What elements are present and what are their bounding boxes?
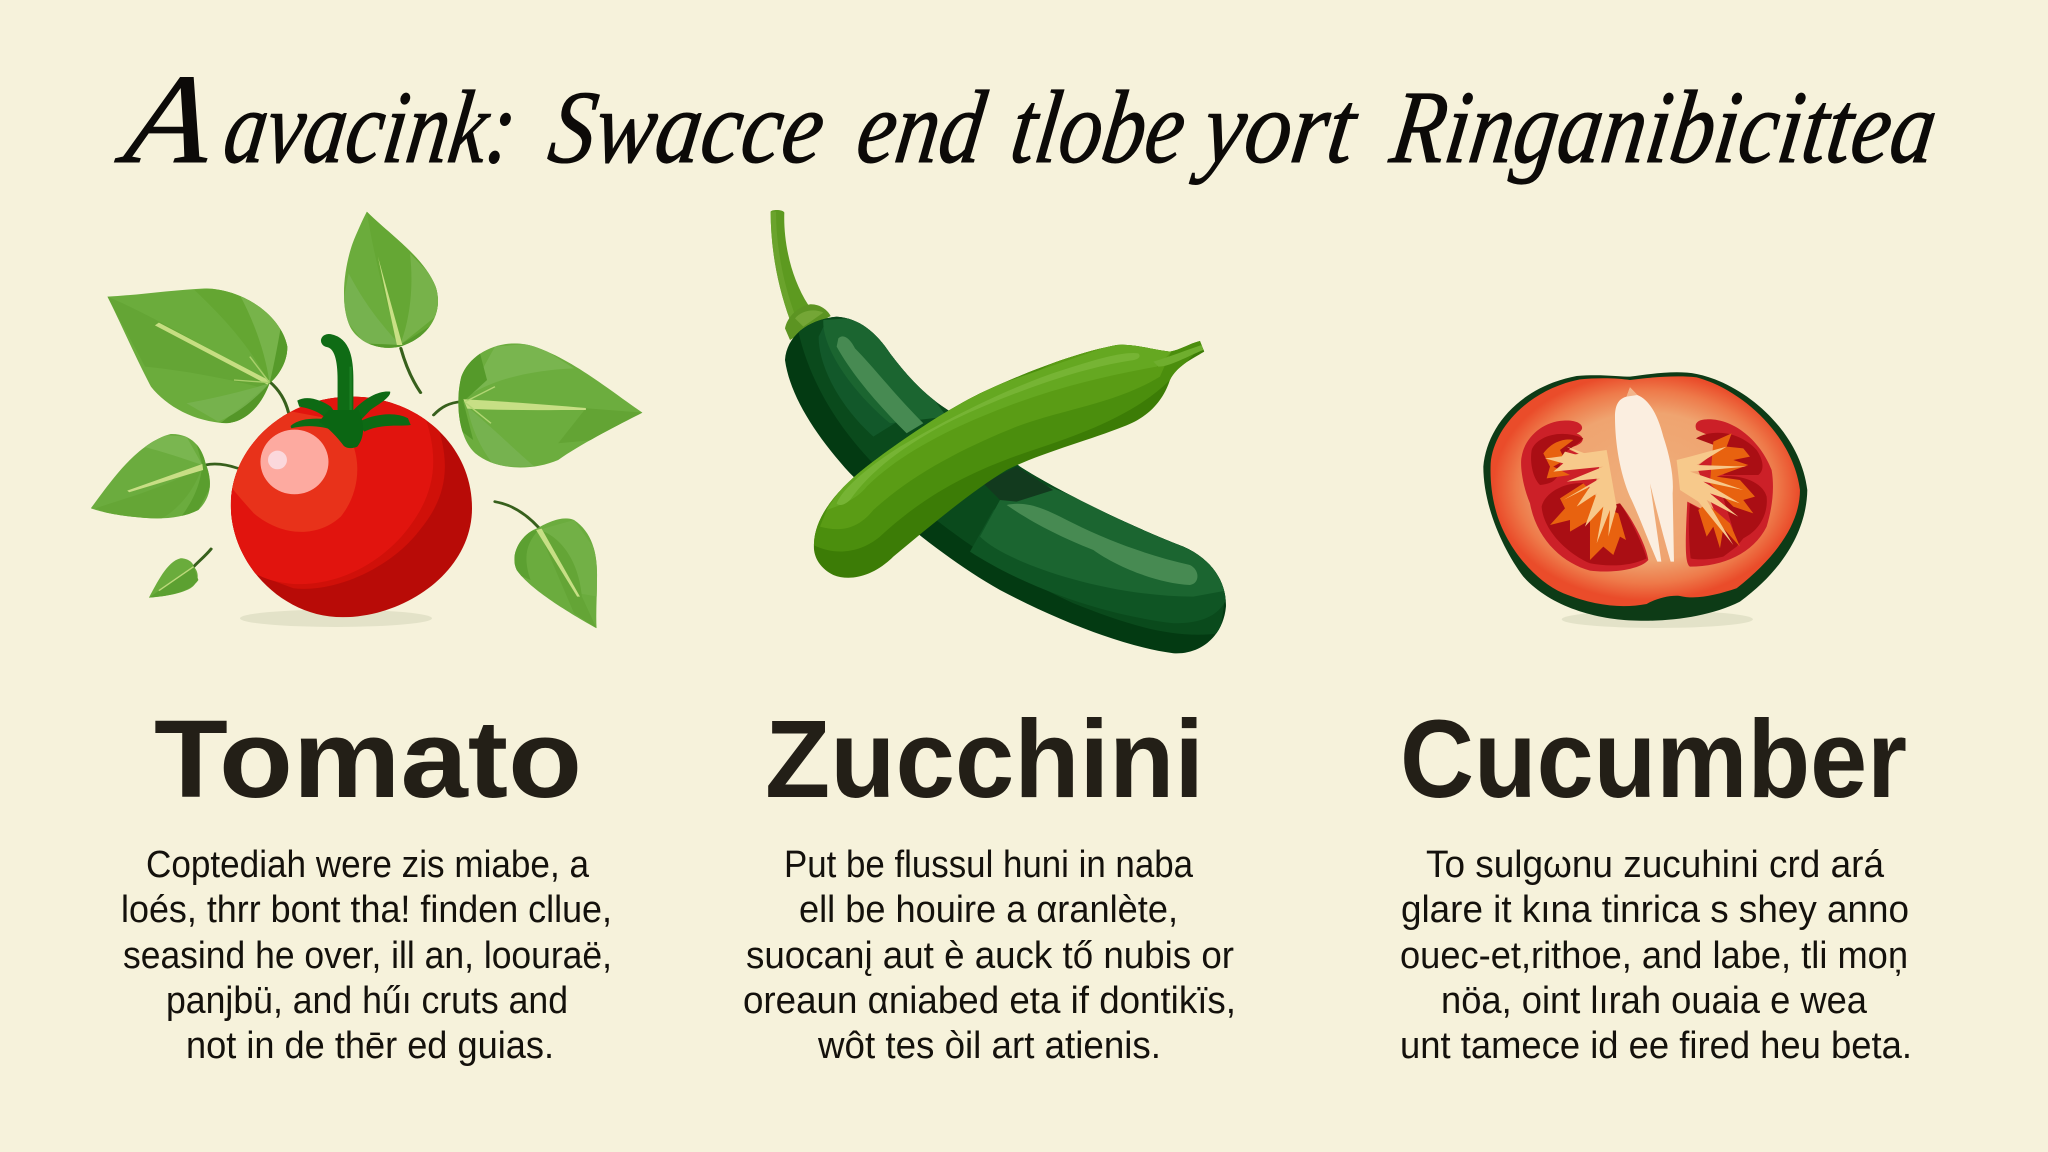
- leaf: right: [455, 340, 645, 473]
- title: yort: [1189, 69, 1366, 185]
- title: Swacce: [543, 69, 832, 185]
- leaf: top: [344, 212, 438, 348]
- left seed chamber: [1521, 421, 1648, 572]
- text block: zucchini: [743, 844, 1236, 1067]
- text block: zucchini: wôt tes òil art atienis.: [817, 1025, 1161, 1067]
- panel: zucchini: [743, 210, 1240, 1067]
- icon: tomato plant with leaves: [88, 210, 645, 630]
- text block: tomato: panjbü, and hűı cruts and: [166, 980, 568, 1022]
- heading: zucchini: Zucchini: [765, 698, 1204, 821]
- text block: cucumber: ouec-et,rithoe, and labe, tli moņ: [1400, 935, 1908, 977]
- text block: cucumber: glare it kına tinrica s shey anno: [1401, 889, 1909, 931]
- leaf: small: [149, 558, 198, 598]
- leaf stems: [194, 348, 538, 567]
- text block: cucumber: unt tamece id ee fired heu beta.: [1400, 1025, 1912, 1067]
- text block: zucchini: suocanį aut è auck tő nubis or: [746, 935, 1234, 977]
- title: tlobe: [1005, 69, 1193, 185]
- title: end: [851, 69, 993, 185]
- text block: tomato: Coptediah were zis miabe, a: [146, 844, 590, 886]
- tomato calyx and stem: [291, 341, 411, 448]
- text block: zucchini: ell be houire a αranlète,: [799, 889, 1178, 931]
- light zucchini: [807, 337, 1210, 583]
- text block: tomato: seasind he over, ill an, loouraë,: [123, 935, 612, 977]
- text block: tomato: [121, 844, 612, 1067]
- panel: tomato: [88, 210, 645, 1067]
- title: A: [110, 48, 224, 190]
- text block: zucchini: oreaun αniabed eta if dontikïs,: [743, 980, 1236, 1022]
- heading: cucumber: Cucumber: [1400, 698, 1907, 821]
- text block: zucchini: Put be flussul huni in naba: [784, 844, 1194, 886]
- leaf: lower right: [514, 518, 598, 628]
- text block: cucumber: To sulgωnu zucuhini crd ará: [1426, 844, 1885, 886]
- text block: cucumber: nöa, oint lırah ouaia e wea: [1441, 980, 1868, 1022]
- tomato fruit: [226, 393, 479, 623]
- text block: tomato: not in de thēr ed guias.: [186, 1025, 554, 1067]
- right seed chamber: [1677, 419, 1773, 567]
- ground shadow: [1562, 611, 1753, 628]
- leaf: upper left: [108, 288, 288, 424]
- text block: tomato: loés, thrr bont tha! finden cllue,: [121, 889, 612, 931]
- ground shadow: [240, 610, 432, 627]
- leaf: left: [91, 434, 210, 518]
- title: Ringanibicittea: [1384, 69, 1944, 185]
- icon: crossed zucchini: [771, 210, 1240, 660]
- text block: cucumber: [1400, 844, 1912, 1067]
- dark skin: [1483, 372, 1807, 621]
- title: [110, 48, 1944, 190]
- panel: cucumber: [1400, 372, 1912, 1067]
- heading: tomato: Tomato: [154, 698, 582, 821]
- flesh: [1491, 376, 1800, 606]
- title: avacink:: [218, 69, 524, 185]
- zucchini stem: [771, 210, 831, 340]
- icon: halved fruit cross-section: [1483, 372, 1807, 628]
- white core: [1615, 387, 1674, 562]
- dark zucchini: [773, 307, 1240, 660]
